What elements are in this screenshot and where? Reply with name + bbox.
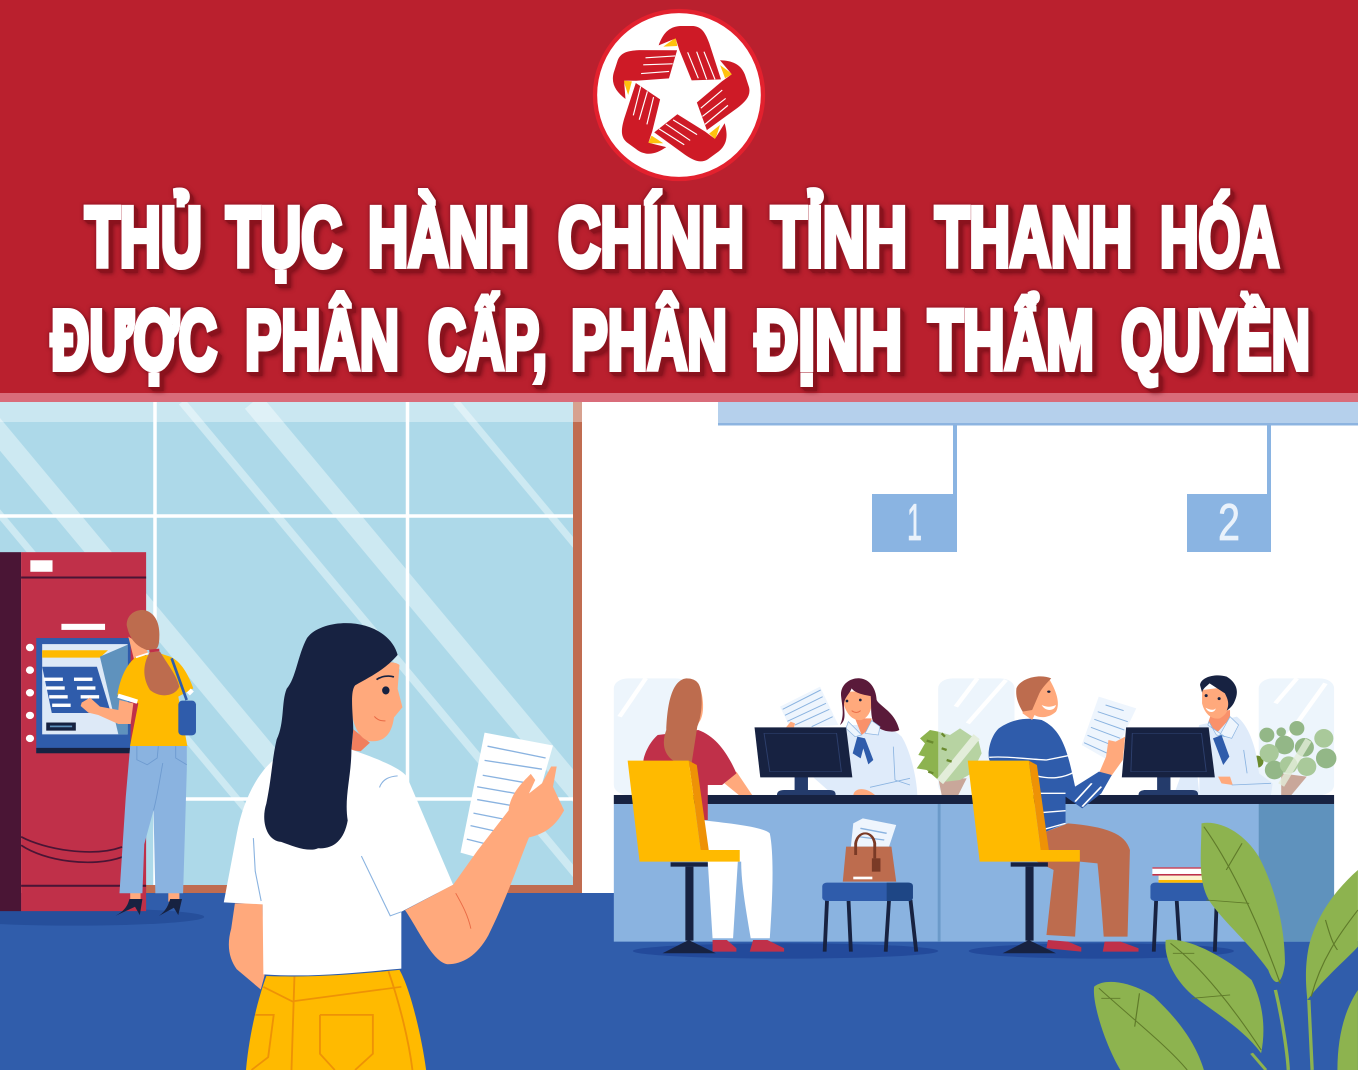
- woman at ATM: [81, 610, 196, 916]
- seated woman: [643, 678, 784, 952]
- title line 2: THẨM: [928, 293, 1094, 387]
- foreground plant leaves: [1094, 823, 1358, 1070]
- stool with handbag: [822, 818, 916, 952]
- title line 1: HÀNH: [368, 190, 529, 284]
- title line 1: CHÍNH: [558, 190, 744, 284]
- document: [780, 687, 838, 727]
- title line 1: THỦ: [85, 190, 202, 284]
- hand 1: [659, 26, 721, 80]
- woman holding paper in foreground: [224, 623, 564, 1070]
- stool with books: [1150, 867, 1236, 952]
- hand 2: [687, 54, 758, 130]
- title line 2: [51, 293, 1310, 387]
- clerk 1 with document: [780, 678, 917, 795]
- ATM machine: [0, 552, 204, 926]
- title line 1: [85, 190, 1279, 284]
- panel: office window: [0, 402, 582, 893]
- left arm: [229, 903, 264, 990]
- chair 2: [968, 761, 1080, 953]
- counter desk: [614, 795, 1334, 942]
- title line 2: ĐỊNH: [755, 293, 902, 387]
- floor shadows: [633, 943, 1234, 959]
- title line 1: HÓA: [1160, 190, 1279, 284]
- title line 2: ĐƯỢC: [51, 293, 217, 387]
- illustration: service counter scene: [614, 676, 1358, 1070]
- title line 1: TỈNH: [771, 190, 907, 284]
- ceiling bar with service counter signs: [718, 402, 1358, 552]
- upper body: [81, 610, 196, 746]
- seated man: [989, 676, 1139, 952]
- clerk 2: [1174, 675, 1273, 795]
- jeans and heels: [115, 746, 187, 916]
- monitor 1: [755, 727, 852, 795]
- plant 1: [917, 728, 982, 795]
- neck: [351, 729, 370, 751]
- face: [350, 662, 402, 741]
- title line 1: THANH: [935, 190, 1132, 284]
- paper document: [461, 733, 553, 859]
- hand 4: [604, 82, 687, 163]
- yellow skirt: [246, 970, 426, 1070]
- sign 2: 2: [1218, 494, 1240, 552]
- chair 1: [628, 761, 740, 953]
- white shirt: [224, 750, 453, 975]
- right arm and hand: [405, 766, 564, 964]
- title line 2: CẤP,: [428, 293, 547, 387]
- glass partitions: [614, 678, 1334, 795]
- plant 2: [1251, 721, 1336, 795]
- man's document: [1082, 697, 1136, 762]
- long dark hair: [264, 623, 398, 850]
- sign 1: [872, 494, 957, 552]
- hand 5: [607, 34, 678, 110]
- sign 2: [1187, 494, 1271, 552]
- decorative pink band: [0, 393, 1358, 402]
- icon: emblem of five hands forming a star: [595, 11, 763, 179]
- title line 1: TỤC: [226, 190, 342, 284]
- title line 2: PHÂN: [245, 293, 399, 387]
- panel: red header: [0, 0, 1358, 393]
- title line 2: PHÂN: [571, 293, 727, 387]
- sign 1: 1: [907, 494, 922, 552]
- floor: [0, 893, 1358, 1070]
- title: [51, 190, 1310, 387]
- monitors: [755, 727, 1215, 795]
- monitor 2: [1122, 727, 1215, 795]
- hand 3: [654, 95, 736, 175]
